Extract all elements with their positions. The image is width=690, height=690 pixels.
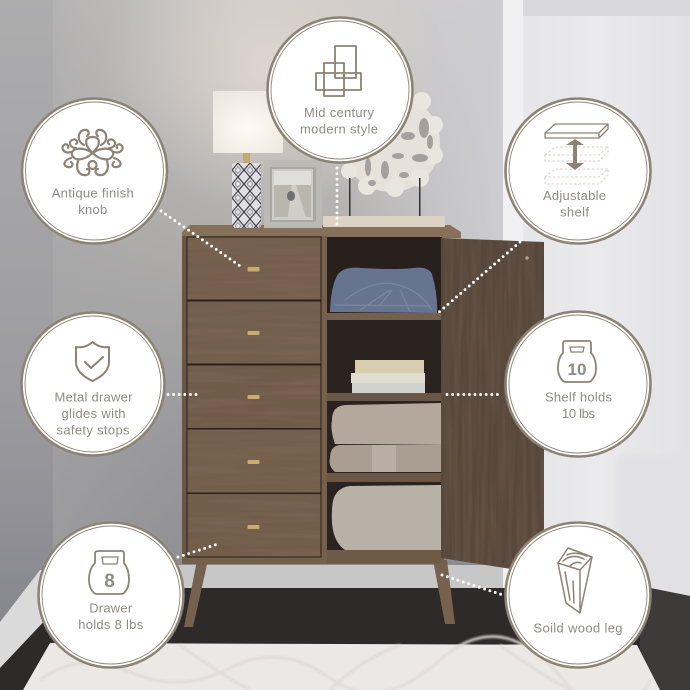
- icon: wood leg: [558, 548, 592, 613]
- label: knob: knob: [78, 202, 107, 217]
- callout: antique finish knob: [22, 98, 167, 244]
- label: soild wood leg: Soild wood leg: [534, 620, 622, 636]
- towels: [330, 403, 441, 472]
- picture frame: [264, 160, 322, 228]
- dresser: [182, 225, 544, 627]
- callout: adjustable shelf: [506, 98, 650, 244]
- icon: kettlebell 8: [89, 551, 129, 594]
- icon: kettlebell 8: 8: [104, 571, 115, 592]
- dotted leader: antique finish knob: [161, 211, 243, 268]
- label: 10 lbs: 10 lbs: [562, 406, 596, 421]
- open door: [441, 238, 544, 574]
- label: drawer: Drawer: [89, 600, 133, 616]
- label: glides with: glides with: [62, 406, 126, 421]
- label: antique finish: Antique finish: [52, 186, 134, 200]
- dotted leader: mid century style: [336, 168, 338, 224]
- drawer handles: [248, 267, 260, 529]
- dresser legs: [184, 560, 455, 627]
- icon: shield with check: [76, 342, 109, 381]
- icon: kettlebell 10: 10: [568, 360, 586, 379]
- label: metal drawer: Metal drawer: [54, 390, 133, 404]
- dotted leader: adjustable shelf: [438, 242, 520, 313]
- rug: [23, 636, 660, 690]
- label: safety stops: safety stops: [56, 422, 130, 438]
- label: shelf holds: Shelf holds: [545, 390, 612, 404]
- blue blanket: [330, 268, 437, 313]
- icon: overlapping rectangles: [316, 46, 361, 96]
- callout: metal drawer glides: [22, 312, 164, 456]
- label: adjustable: Adjustable: [543, 188, 606, 203]
- label: shelf: shelf: [560, 204, 589, 220]
- table lamp: [213, 91, 283, 228]
- label: mid century: Mid century: [304, 105, 374, 120]
- dotted leader: drawer glides: [168, 393, 199, 396]
- callout: shelf holds 10 lbs: [506, 312, 650, 456]
- callout: mid century modern style: [268, 18, 412, 162]
- dotted leader: shelf load: [447, 393, 502, 396]
- icon: ornate knot: [62, 130, 123, 175]
- knit blanket: [332, 485, 441, 550]
- callout: drawer holds 8 lbs: [38, 522, 184, 668]
- dotted leader: wood leg: [442, 575, 503, 595]
- open shelving: [327, 237, 442, 563]
- callout: solid wood leg: [506, 522, 650, 668]
- dresser carcass: [182, 225, 461, 564]
- decorative mandala: [323, 86, 445, 227]
- stacked books: [351, 360, 425, 393]
- label: modern style: modern style: [300, 122, 378, 136]
- icon: adjustable shelf: [545, 124, 608, 184]
- drawers: [186, 236, 322, 558]
- label: holds 8 lbs: holds 8 lbs: [78, 617, 144, 632]
- dotted leader: drawer load: [178, 544, 218, 557]
- icon: kettlebell 10: [558, 341, 596, 382]
